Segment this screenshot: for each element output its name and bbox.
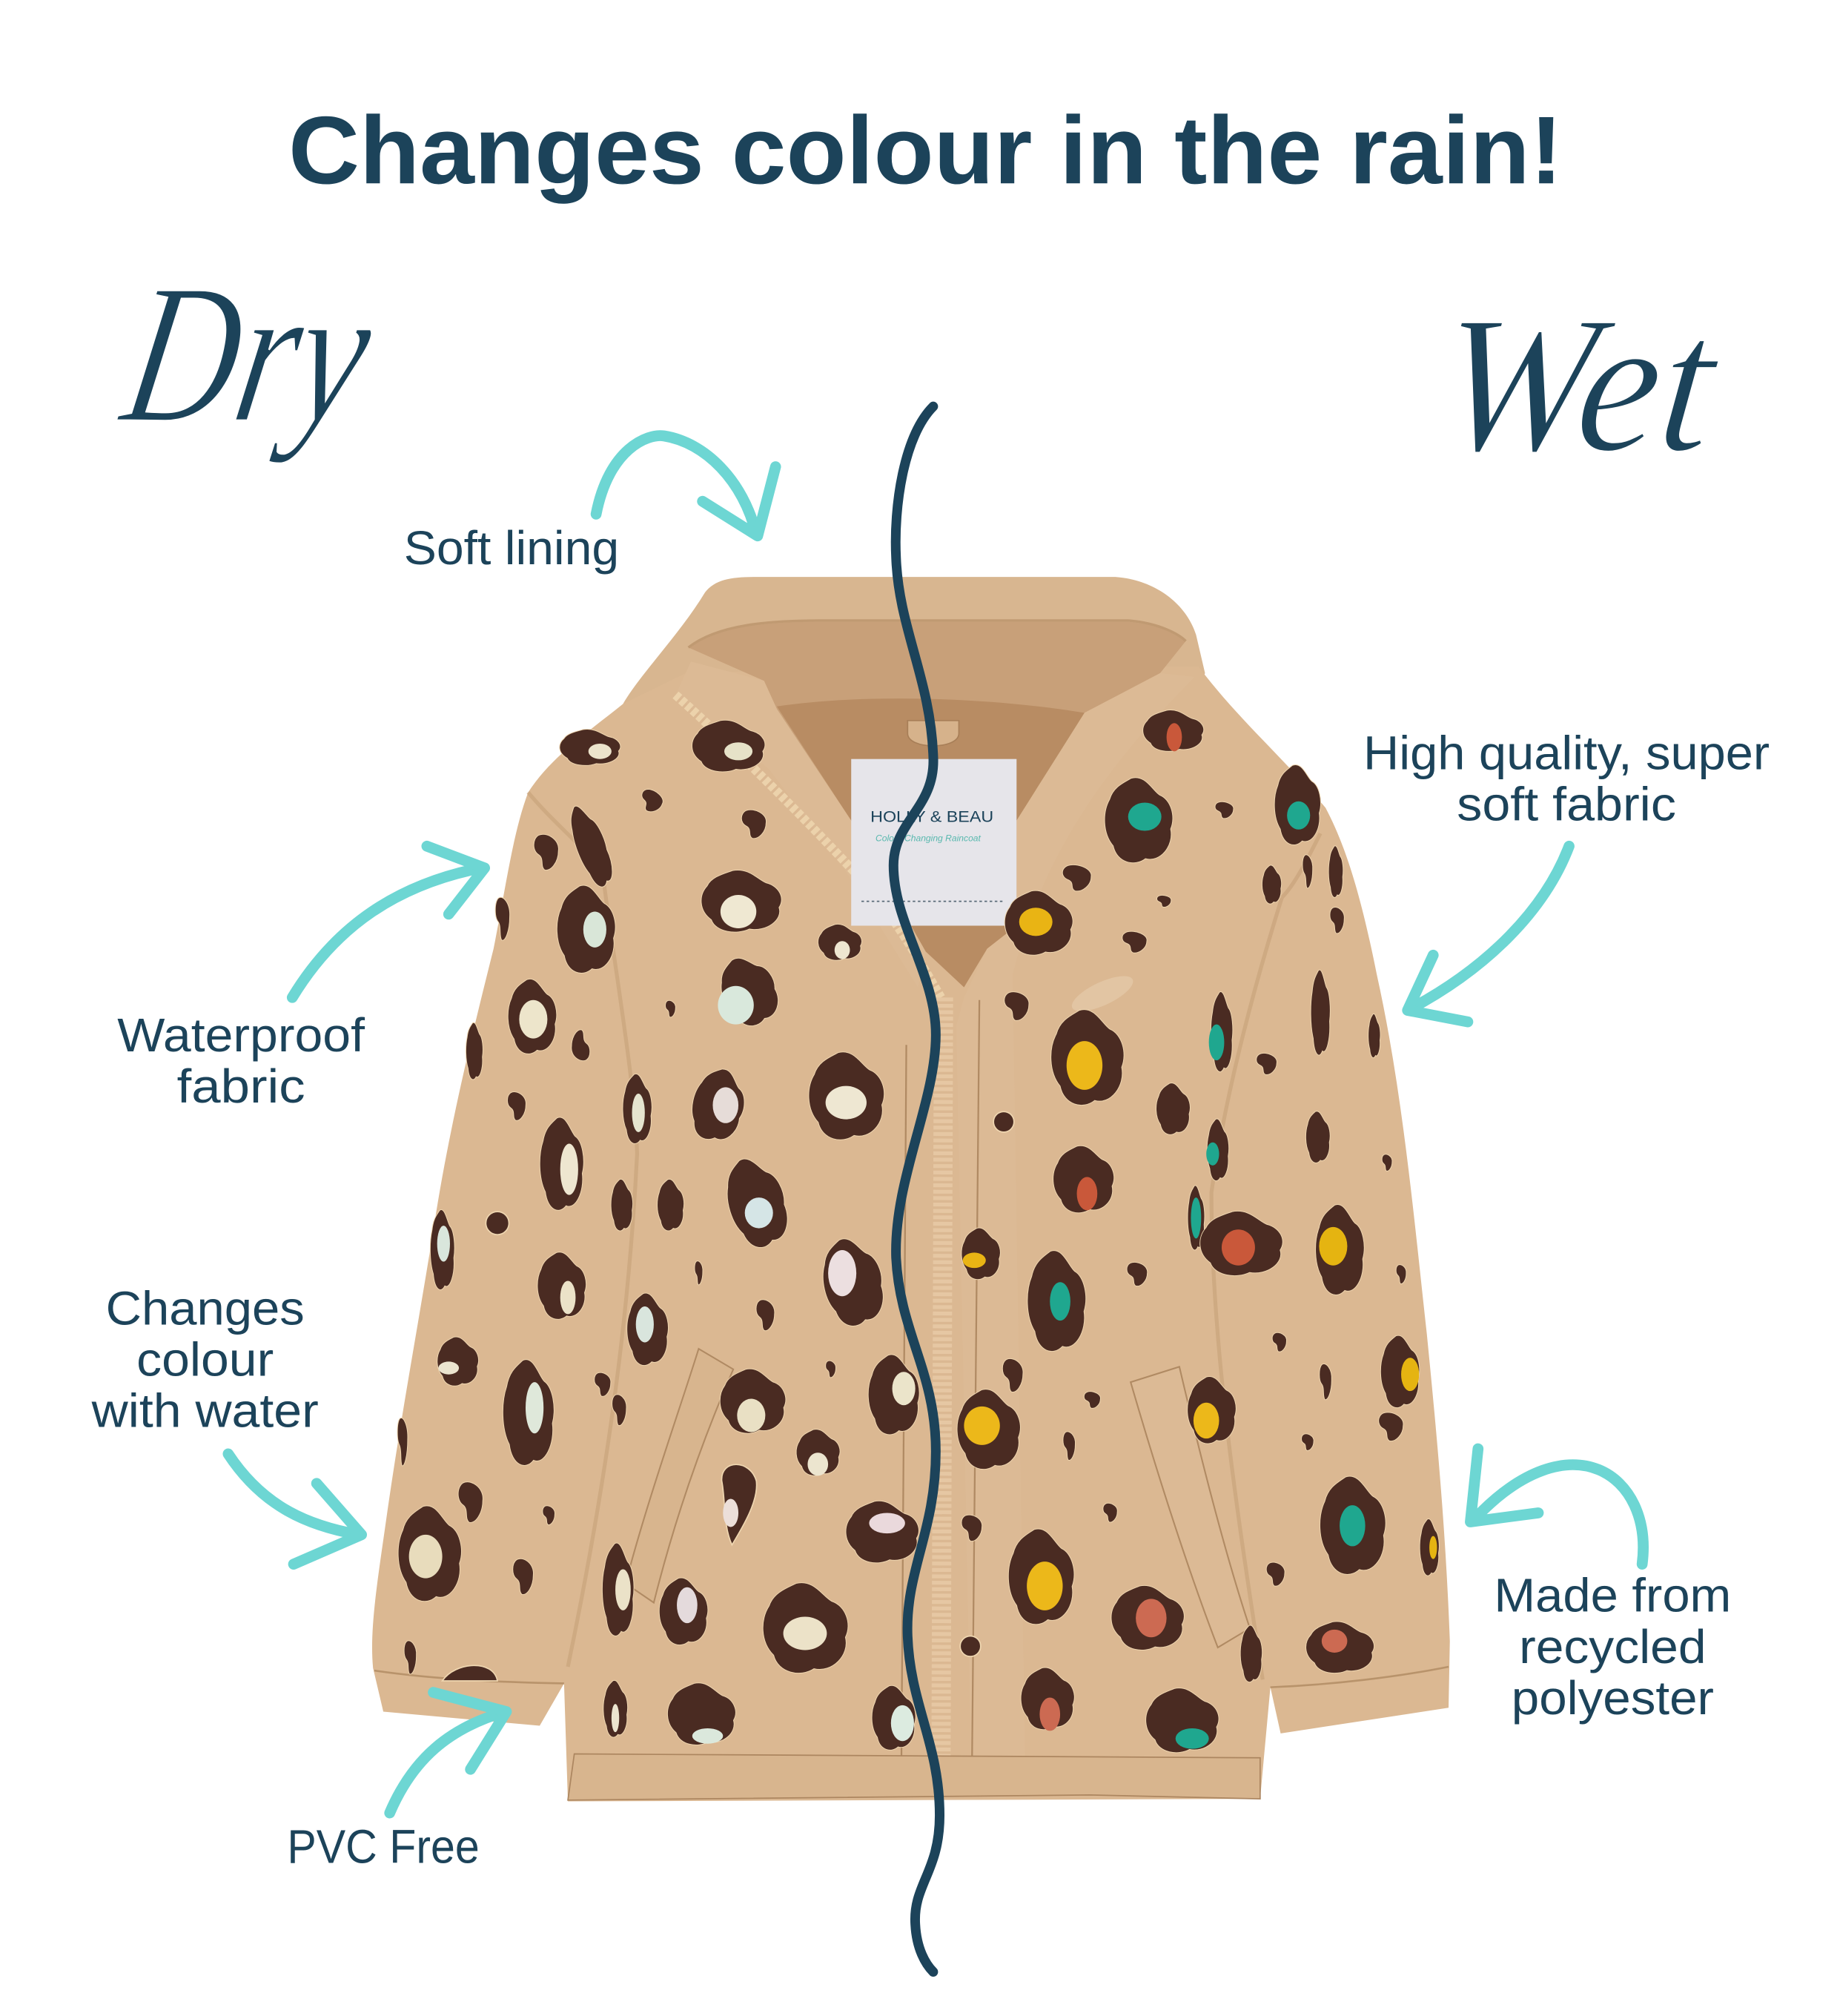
jacket: hood rim stitch: [689, 621, 1186, 647]
jacket: neck lining: [777, 698, 1085, 987]
label: high quality fabric: High quality, super: [1363, 727, 1770, 780]
label: high quality fabric: [1363, 727, 1770, 831]
jacket: right cuff stitch: [1271, 1667, 1449, 1688]
jacket: wet sheen highlight: [1068, 969, 1137, 1018]
jacket: placket stitch lines: [901, 1000, 979, 1795]
label: changes colour with water: with water: [91, 1384, 319, 1438]
jacket: dry side leopard spots: [397, 720, 919, 1750]
label: high quality fabric: soft fabric: [1457, 778, 1676, 831]
jacket: centre zip: [941, 997, 944, 1788]
jacket: hood lining: [689, 622, 1186, 987]
jacket: brand label: [851, 721, 1016, 925]
title: Changes colour in the rain!: [288, 97, 1563, 204]
jacket: left zip edge: [675, 695, 941, 997]
arrow: soft lining: [596, 436, 775, 536]
label: changes colour with water: colour: [136, 1332, 274, 1386]
heading: Wet: Wet: [1430, 275, 1729, 492]
centre wavy divider: [893, 406, 940, 1972]
label: changes colour with water: [91, 1281, 319, 1438]
label: waterproof fabric: Waterproof: [117, 1008, 365, 1062]
label: soft lining: Soft lining: [404, 521, 619, 575]
jacket: right pocket: [1131, 1366, 1250, 1647]
arrow: high quality fabric: [1408, 846, 1569, 1022]
jacket: sleeve shading: [528, 793, 1320, 1679]
jacket: left cuff stitch: [374, 1670, 564, 1683]
label: changes colour with water: Changes: [106, 1281, 305, 1335]
label: recycled polyester: polyester: [1512, 1671, 1714, 1725]
jacket: main body and sleeves: [372, 667, 1450, 1802]
label: recycled polyester: Made from: [1494, 1569, 1731, 1622]
heading: Dry: Dry: [108, 242, 388, 464]
jacket: right collar placket: [956, 673, 1195, 1795]
label: waterproof fabric: [117, 1008, 365, 1113]
jacket: brand label: HOLLY & BEAU: [870, 807, 993, 825]
jacket: brand label: Colour Changing Raincoat: [876, 833, 982, 843]
arrow: waterproof: [292, 846, 485, 997]
jacket: left pocket: [626, 1349, 733, 1603]
label: recycled polyester: [1494, 1569, 1731, 1725]
jacket: hood back: [623, 577, 1205, 756]
arrow: changes colour: [228, 1454, 362, 1564]
jacket illustration: [372, 577, 1450, 1802]
label: recycled polyester: recycled: [1519, 1620, 1707, 1673]
jacket: wet side leopard spots: [957, 710, 1439, 1753]
label: waterproof fabric: fabric: [177, 1060, 305, 1113]
label: PVC free: PVC Free: [287, 1820, 480, 1874]
jacket: left collar flap: [675, 661, 926, 987]
jacket: hem band: [568, 1754, 1260, 1800]
arrow: PVC free: [390, 1693, 506, 1813]
arrow: recycled polyester: [1470, 1449, 1644, 1564]
